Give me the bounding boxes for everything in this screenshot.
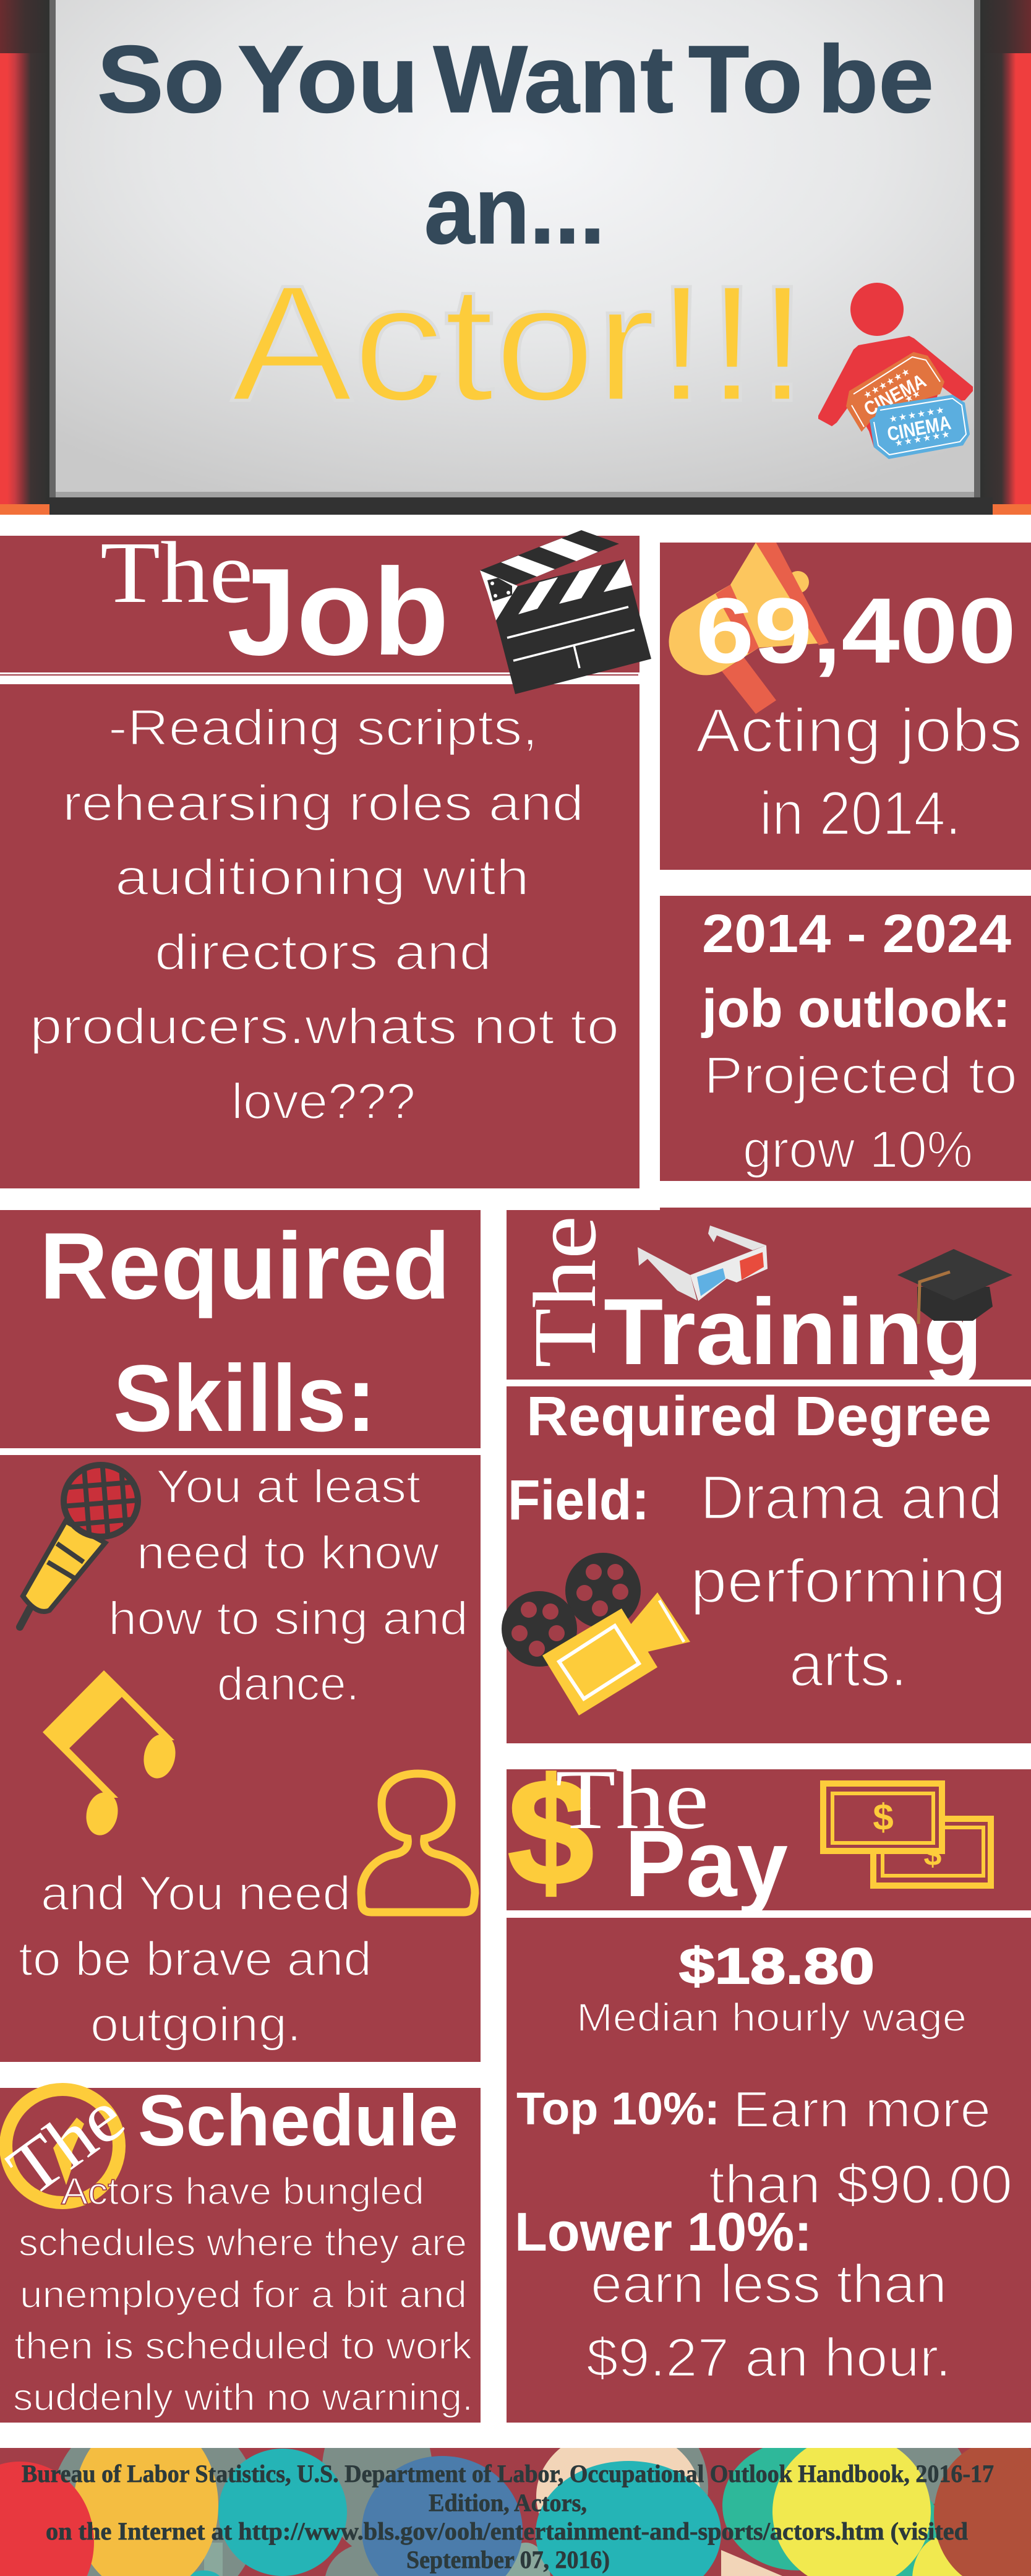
heading: Schedule: Schedule: [138, 2080, 458, 2161]
icon: film camera: [502, 1553, 690, 1715]
pay header background: [507, 1769, 1031, 1910]
citation text: on the Internet at http://www.bls.gov/ooh/entertainment-and-sports/actors.htm (visited: [46, 2517, 968, 2545]
header rule: [0, 674, 638, 676]
icon: person outline: [361, 1774, 475, 1912]
orange ticket: ★★: [903, 388, 923, 405]
degree field text: Drama and: [700, 1463, 1003, 1532]
icon: money bills: [823, 1784, 991, 1886]
schedule text: suddenly with no warning.: [13, 2376, 473, 2418]
icon: music note: [43, 1670, 179, 1838]
schedule text: [13, 2170, 473, 2418]
degree field text: [690, 1463, 1006, 1699]
training header background: [507, 1208, 1031, 1380]
skills text: brave and outgoing: and You need: [41, 1866, 351, 1920]
icon: megaphone: [669, 543, 829, 714]
skills text: brave and outgoing: outgoing.: [90, 1997, 301, 2051]
job description text: auditioning with: [115, 849, 529, 906]
training body background: [507, 1386, 1031, 1743]
outlook panel background: [660, 896, 1031, 1181]
skills body background: [0, 1455, 481, 2062]
panel: acting jobs statistic: [660, 543, 1031, 870]
skills header background: [0, 1210, 481, 1448]
statistic caption: Acting jobs: [696, 696, 1022, 765]
job header background: [0, 536, 640, 672]
statistic caption: [696, 696, 1022, 848]
blue ticket: ★★★★★★: [888, 405, 945, 425]
schedule text: then is scheduled to work: [14, 2325, 473, 2367]
citation text: [22, 2460, 994, 2574]
job description text: producers.whats not to: [30, 998, 619, 1055]
icon: graduation cap: [897, 1249, 1012, 1324]
heading: Job: Job: [227, 543, 449, 681]
heading: Required Skills: Skills:: [113, 1346, 376, 1451]
degree field text: performing: [690, 1547, 1006, 1616]
job description text: rehearsing roles and: [62, 775, 584, 831]
outlook heading: [701, 904, 1011, 1039]
skills text: brave and outgoing: [19, 1866, 372, 2051]
skills text: sing and dance: dance.: [217, 1658, 359, 1711]
heading: Required Skills: [40, 1213, 450, 1451]
heading: The: The: [100, 523, 253, 621]
icon: 3D glasses: [638, 1226, 768, 1301]
icon: yellow ring: [6, 2090, 119, 2202]
icon: microphone: [20, 1460, 139, 1627]
heading: The: The: [555, 1752, 709, 1847]
blue ticket: ★★★★★★: [894, 429, 951, 449]
projection screen: [56, 0, 974, 492]
header: cinema screen with title: [0, 0, 1031, 515]
footer: source citation: [0, 2448, 1031, 2576]
top 10% value: [709, 2080, 1012, 2215]
lower 10% value: [586, 2253, 951, 2388]
schedule text: schedules where they are: [19, 2222, 467, 2264]
heading: Pay: Pay: [625, 1811, 788, 1917]
lower 10% value: earn less than: [591, 2253, 947, 2314]
statistic caption: in 2014.: [759, 779, 961, 848]
outlook heading: job outlook:: [701, 979, 1011, 1039]
caption: median hourly wage: Median hourly wage: [576, 1995, 967, 2040]
panel: the training: [502, 1208, 1031, 1743]
outlook text: Projected to: [704, 1046, 1017, 1104]
degree field text: arts.: [789, 1630, 907, 1699]
skills text: sing and dance: [108, 1461, 468, 1711]
screen edges: [49, 0, 980, 497]
footer background circles: [0, 2448, 1031, 2576]
orange ticket: CINEMA: [860, 369, 930, 421]
outlook heading: 2014 - 2024: [702, 904, 1011, 964]
required degree label: Required Degree: [526, 1386, 991, 1448]
label: top 10%: Top 10%:: [516, 2083, 720, 2134]
lower 10% value: $9.27 an hour.: [586, 2327, 951, 2388]
schedule text: Actors have bungled: [61, 2170, 424, 2212]
jobs panel background: [660, 543, 1031, 870]
citation text: Bureau of Labor Statistics, U.S. Department of Labor, Occupational Outlook Handbook, 2016-17: [22, 2460, 994, 2488]
skills text: brave and outgoing: to be brave and: [19, 1931, 372, 1986]
panel: required skills: [0, 1210, 481, 2062]
icon: money bills: $: [873, 1797, 894, 1838]
title line one: So You Want To be: [97, 26, 934, 132]
outlook text: grow 10%: [743, 1120, 973, 1179]
skills text: sing and dance: how to sing and: [108, 1592, 468, 1645]
top 10% value: than $90.00: [709, 2153, 1012, 2215]
job description text: -Reading scripts,: [108, 700, 538, 756]
blue ticket: [870, 395, 970, 459]
heading: Training: Training: [604, 1279, 983, 1385]
field label: Field:: [508, 1469, 649, 1532]
skills text: sing and dance: need to know: [137, 1527, 440, 1579]
panel: the schedule: [0, 2075, 481, 2423]
citation text: September 07, 2016): [406, 2546, 610, 2574]
citation text: Edition, Actors,: [429, 2489, 587, 2517]
icon: person holding cinema tickets: [818, 283, 973, 459]
title line two: an...: [424, 157, 605, 264]
screen bottom edge: [56, 492, 974, 497]
panel: the job: [0, 523, 651, 1188]
blue ticket: CINEMA: [885, 411, 952, 445]
orange ticket: ★★★★★★: [862, 366, 912, 401]
heading: Required Skills: Required: [40, 1213, 450, 1319]
job description text: [30, 700, 619, 1130]
statistic: 69,400: 69,400: [696, 578, 1016, 682]
statistic: median wage: $18.80: [679, 1938, 875, 1994]
right curtain: [980, 0, 1031, 515]
schedule text: unemployed for a bit and: [20, 2273, 467, 2316]
schedule background: [0, 2088, 481, 2423]
pay body background: [507, 1918, 1031, 2423]
outlook text: [704, 1046, 1017, 1179]
left curtain: [0, 0, 49, 515]
job description text: directors and: [155, 924, 492, 981]
skills text: sing and dance: You at least: [156, 1461, 421, 1513]
screen frame bottom: [49, 497, 993, 515]
top 10% value: Earn more: [733, 2080, 991, 2138]
icon: money bills: $: [924, 1837, 942, 1873]
icon: clapperboard: [480, 530, 651, 694]
icon: dollar sign: $: [508, 1747, 594, 1917]
job description text: love???: [231, 1073, 416, 1130]
panel: the pay: [507, 1747, 1031, 2423]
label: lower 10%: Lower 10%:: [515, 2201, 812, 2262]
orange ticket: [846, 352, 944, 432]
heading: rotated The: The: [516, 1216, 615, 1368]
job body background: [0, 684, 640, 1188]
panel: job outlook: [660, 896, 1031, 1181]
title word: Actor: Actor!!!: [231, 251, 808, 436]
